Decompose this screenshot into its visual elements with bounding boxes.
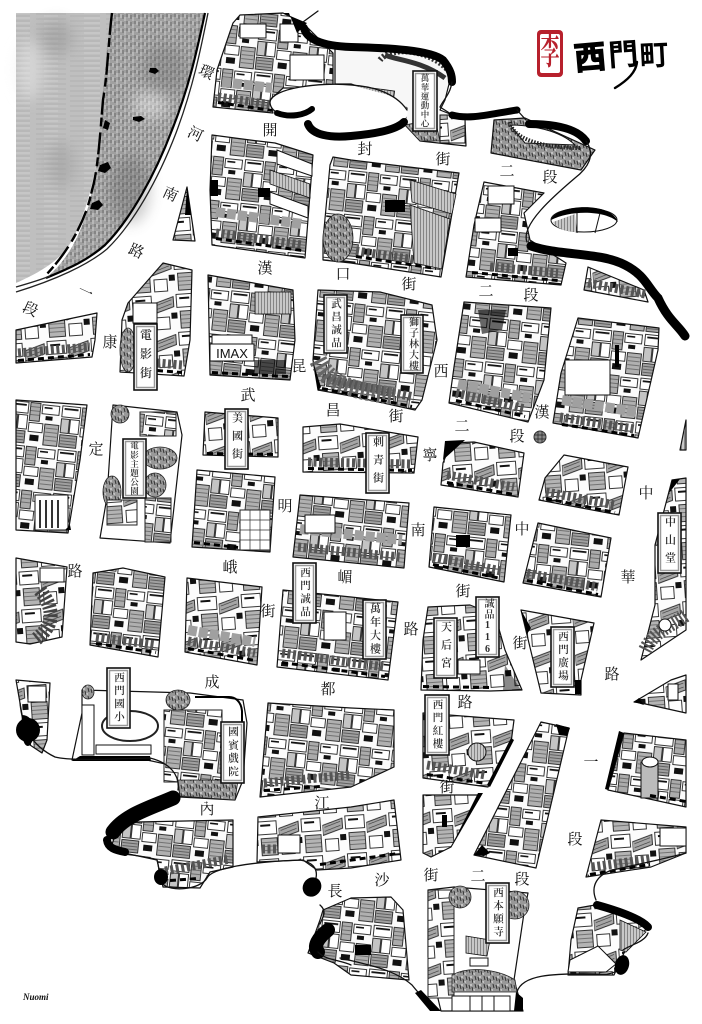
block: Kunming southwest	[16, 680, 50, 753]
Hanzhong Street label	[512, 403, 550, 652]
label: Tianhou Temple	[434, 618, 457, 678]
Zhonghua Road label	[567, 485, 654, 848]
label: Zhongshan Hall: 中山堂	[664, 515, 676, 570]
block: park north east	[491, 118, 595, 170]
block: Emei west	[90, 568, 165, 657]
block: east round tower	[605, 731, 686, 807]
Neijiang Street label: 江	[314, 795, 330, 812]
Kangding Road label: 康	[102, 334, 118, 351]
north road edge	[304, 28, 452, 82]
label: Red House	[425, 695, 449, 755]
block: Tianhou temple	[421, 605, 522, 691]
block: Zhonghua north	[539, 455, 628, 515]
Changsha Street label: 二	[470, 869, 486, 885]
Neijiang Street label	[199, 779, 455, 818]
Emei Street label: 峨	[222, 559, 238, 576]
credit: Nuomi: Nuomi	[22, 992, 49, 1002]
Zhonghua Road label: 路	[604, 666, 620, 683]
title: Ximending	[572, 38, 669, 88]
block: Emei south	[293, 495, 409, 568]
label: Nishi Honganji	[486, 883, 509, 943]
block: Kaifeng second section	[466, 182, 566, 285]
Kaifeng Street label: 街	[435, 151, 451, 168]
label: Ximen Eslite	[293, 563, 316, 623]
Neijiang Street label: 街	[439, 779, 455, 796]
label: Wannian Building: 萬年大樓	[368, 601, 381, 656]
Zhonghua Road label: 段	[567, 831, 583, 848]
label: American Street	[225, 409, 248, 469]
Hanzhong Street label: 漢	[534, 403, 550, 421]
Kaifeng Street label: 開	[262, 122, 278, 139]
Hankou Street label: 段	[523, 287, 539, 304]
label: Eslite 116: 誠品116	[482, 597, 494, 656]
Wuchang Street label: 昌	[325, 402, 341, 419]
block: Chengdu south	[260, 703, 394, 797]
icon: small globe	[534, 431, 546, 443]
label: Movie Street	[134, 324, 157, 390]
block: small triangle	[173, 187, 195, 241]
block: northwest corner	[213, 13, 333, 113]
Kunming Street label: 明	[277, 498, 293, 515]
white bay	[270, 84, 408, 137]
Xining South Road label: 西	[433, 363, 449, 380]
Zhonghua Road label: 華	[620, 568, 636, 586]
block: oval enclave	[551, 207, 618, 233]
block: Nanning center	[429, 507, 511, 582]
block: Emei street	[185, 578, 262, 665]
river and riverside park	[16, 13, 208, 292]
label: Ximen Eslite: 西門誠品	[299, 567, 310, 619]
label: Movie Street: 電影街	[138, 327, 152, 386]
block: Neijiang west	[110, 820, 233, 888]
Emei Street label	[222, 559, 471, 600]
block: sports centre	[335, 48, 466, 146]
label: Wuchang Eslite	[324, 295, 347, 353]
label: Tianhou Temple: 天后宮	[440, 621, 452, 675]
label: Lion Forest Building: 獅子林大樓	[406, 315, 418, 372]
label: Wannian Building	[363, 600, 386, 659]
label: Wuchang Eslite: 武昌誠品	[330, 297, 341, 350]
Hankou Street label	[257, 259, 539, 304]
Wuchang Street label: 二	[454, 419, 470, 435]
Xining South Road label: 路	[403, 621, 419, 638]
Hankou Street label: 二	[478, 284, 494, 300]
Hankou Street label: 漢	[257, 259, 273, 277]
block: Kunming west	[16, 558, 67, 644]
Wuchang Street label: 段	[509, 428, 525, 445]
block: Changsha west	[308, 897, 409, 980]
Chengdu Road label: 成	[204, 674, 220, 691]
label: Zhongshan Hall	[658, 513, 681, 573]
Huanhe South Road label: 一	[75, 283, 95, 303]
Emei Street label: 嵋	[337, 569, 353, 586]
river water	[16, 13, 112, 283]
Chengdu Road label	[204, 674, 473, 711]
block: Hanzhong triangle	[423, 793, 483, 857]
Kangding Road label	[67, 334, 118, 580]
label: Movie Theme Park	[123, 439, 146, 498]
Wuchang Street label: 街	[388, 408, 404, 425]
icon: red seal: 李	[540, 31, 560, 73]
label: American Street: 美國街	[230, 411, 243, 466]
Kunming Street label	[260, 358, 307, 620]
Huanhe South Road label: 路	[126, 241, 147, 262]
block: American street	[203, 412, 278, 457]
Kaifeng Street label: 封	[357, 141, 373, 158]
block: Zhongshan Hall	[641, 478, 686, 660]
block: Nishi Honganji temple	[428, 886, 529, 1011]
Changsha Street label: 沙	[374, 872, 390, 889]
title: Ximending: 門	[607, 38, 639, 73]
Changsha Street label: 街	[423, 867, 439, 884]
label: Ximen Elementary	[107, 668, 130, 728]
Hankou Street label: 街	[401, 276, 417, 293]
Kaifeng Street label	[262, 122, 558, 186]
block: Ximen Square	[521, 610, 594, 695]
Hanzhong Street label: 中	[514, 521, 530, 538]
landmark labels	[107, 71, 681, 943]
IMAX sign: IMAX	[216, 346, 248, 361]
Huanhe South Road label: 段	[20, 299, 41, 320]
block: east lower	[586, 820, 686, 877]
Hankou Street label: 口	[335, 267, 351, 283]
Zhonghua Road label: 一	[583, 755, 599, 771]
block: Kangding top	[120, 263, 192, 376]
Huanhe South Road label	[20, 62, 217, 320]
label: Ambassador Theatre	[221, 722, 244, 783]
icon: red seal	[537, 30, 563, 77]
title: Ximending: 西	[572, 38, 608, 77]
label: Wanhua Sports Center	[413, 71, 437, 131]
block: IMAX	[208, 275, 295, 380]
block: Hankou east	[553, 318, 659, 438]
block: right edge fragment	[680, 420, 686, 450]
block: long diagonal	[474, 722, 570, 868]
Chengdu Road label: 路	[457, 694, 473, 711]
Huanhe South Road label: 環	[196, 62, 217, 83]
block: west road	[16, 313, 97, 363]
Changsha Street label: 長	[327, 883, 343, 900]
label: Tattoo Street: 刺青街	[372, 435, 384, 490]
Wuchang Street label: 武	[240, 387, 256, 404]
label: Ambassador Theatre: 國賓戲院	[226, 726, 238, 779]
riverside park	[46, 13, 205, 278]
Emei Street label: 街	[455, 583, 471, 600]
label: Ximen Square: 西門廣場	[556, 631, 568, 683]
label: Eslite 116	[476, 597, 499, 657]
block: Wuchang south	[192, 470, 275, 552]
Kunming Street label: 街	[260, 603, 276, 620]
block: Hankou north	[323, 157, 459, 277]
block: northeast small	[584, 267, 648, 302]
label: Ximen Elementary: 西門國小	[112, 672, 124, 724]
Changsha Street label: 段	[514, 871, 530, 888]
label: Lion Forest Building	[401, 315, 423, 373]
Neijiang Street label: 內	[199, 801, 215, 818]
Huanhe South Road label: 南	[160, 184, 181, 205]
label: Wanhua Sports Center: 萬華運動中心	[419, 73, 430, 128]
Kangding Road label: 定	[88, 441, 104, 458]
Zhonghua Road label: 中	[638, 485, 654, 502]
block: Zhonghua center	[523, 523, 611, 597]
block: Hankou second section	[449, 302, 551, 422]
Kunming Street label: 昆	[291, 358, 307, 375]
label: Ximen Square	[551, 627, 574, 687]
road names	[20, 62, 654, 900]
Kaifeng Street label: 段	[542, 169, 558, 186]
block: Ximen elementary and Ambassador	[72, 685, 247, 800]
block: Wuchang Eslite	[313, 290, 437, 410]
block: east tip	[634, 675, 686, 713]
block: Red House	[423, 713, 514, 787]
Changsha Street label	[327, 867, 530, 900]
south road edge	[20, 703, 433, 1010]
block: Movie park	[100, 405, 182, 543]
Chengdu Road label: 都	[320, 681, 336, 698]
Huanhe South Road label: 河	[185, 124, 206, 145]
Kangding Road label: 路	[67, 563, 83, 580]
block: Tattoo street	[303, 424, 418, 473]
road edge line along river	[16, 13, 208, 292]
block: Ning south	[441, 440, 524, 497]
block: south east	[568, 905, 648, 975]
Xining South Road label	[403, 363, 449, 638]
Xining South Road label: 南	[410, 522, 426, 539]
block: south of Kaifeng	[210, 135, 313, 258]
block: Ximen Eslite	[277, 590, 398, 680]
Xining South Road label: 寧	[422, 447, 438, 464]
Kaifeng Street label: 二	[499, 164, 515, 180]
label: Nishi Honganji: 西本願寺	[492, 887, 503, 939]
Hanzhong Street label: 街	[512, 635, 528, 652]
label: Tattoo Street	[366, 433, 389, 493]
label: Red House: 西門紅樓	[432, 699, 443, 751]
block: Kangding west	[16, 400, 87, 533]
label: Movie Theme Park: 電影主題公園	[130, 441, 140, 496]
block: Neijiang east	[257, 800, 401, 870]
Wuchang Street label	[240, 387, 525, 445]
title: Ximending: 町	[639, 40, 669, 73]
